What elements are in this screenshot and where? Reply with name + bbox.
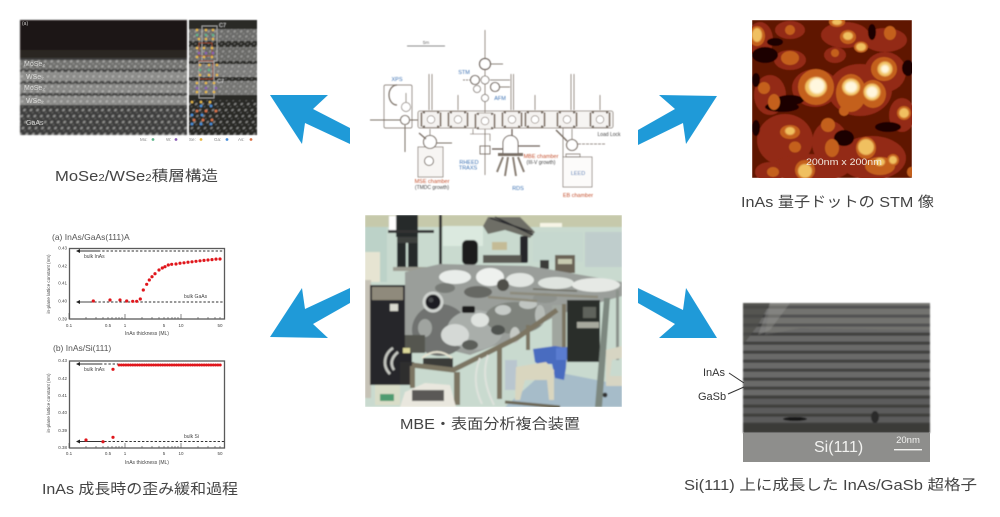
chart: InAs/GaAs(111)A lattice constant — [46, 232, 224, 337]
orange halos — [749, 17, 915, 180]
floor — [505, 370, 622, 407]
chart: InAs/Si(111) lattice constant — [46, 343, 224, 466]
label: InAs layer — [703, 367, 744, 383]
axis tick labels: 0.39 — [58, 428, 67, 433]
MSE chamber — [418, 129, 452, 177]
label: GaSb layer — [698, 387, 744, 403]
reference lines — [76, 362, 224, 444]
axis tick labels: 10 — [178, 451, 184, 456]
labels: dark: (TMDC growth) — [415, 185, 449, 191]
scale bar: 20nm — [894, 435, 922, 450]
axis tick labels — [46, 358, 223, 466]
legend: atom colours — [140, 137, 252, 142]
legend: atom colours: As: — [238, 137, 245, 142]
upper machinery — [483, 217, 535, 238]
labels: layer names: WSe₂ — [26, 98, 44, 105]
image: cross-section right with atom overlay: C7 — [219, 23, 226, 29]
chart title: (a) InAs/GaAs(111)A — [52, 232, 130, 242]
XPS module — [384, 85, 412, 152]
axis tick labels: 0.42 — [58, 376, 67, 381]
axis tick labels: 0.40 — [58, 410, 67, 415]
panel: MoSe2/WSe2 stacked structure micrograph — [20, 20, 257, 142]
panel: STM image of InAs quantum dots — [747, 17, 915, 182]
labels: red: MBE chamber — [524, 154, 559, 160]
labels: red: MSE chamber — [415, 179, 450, 185]
image: cross-section right with atom overlay: C7 — [217, 79, 224, 85]
image: cross-section right with atom overlay — [189, 20, 257, 135]
axis tick labels: 5 — [163, 451, 166, 456]
axis tick labels: 0.42 — [58, 264, 67, 268]
bright dots — [752, 19, 909, 178]
axis tick labels: 0.40 — [58, 298, 67, 304]
labels: layer names: GaAs — [26, 120, 44, 127]
panel: vacuum system diagram — [370, 30, 621, 199]
axis tick labels: 0.1 — [66, 451, 73, 456]
chart title: (b) InAs/Si(111) — [53, 343, 111, 353]
caption: MoSe2/WSe2: MoSe 2/WSe 2積層構造 — [55, 168, 218, 185]
right chair — [606, 346, 622, 386]
frame table — [412, 310, 557, 370]
labels: red — [415, 154, 593, 199]
left rack — [365, 280, 371, 398]
scale bar: 5m — [423, 40, 429, 45]
labels: dark: Load Lock — [597, 132, 621, 138]
main transfer line — [370, 30, 613, 175]
reference lines — [76, 249, 224, 304]
axis tick labels: 0.41 — [58, 280, 67, 286]
blue stools — [533, 346, 567, 380]
caption: STM image: InAs 量子ドットの STM 像 — [741, 194, 935, 211]
data points — [92, 257, 222, 303]
reference lines: bulk Si — [184, 434, 199, 440]
EB chamber and LEED — [556, 128, 606, 187]
labels: layer names: MoSe₂ — [24, 61, 45, 68]
labels: dark — [415, 132, 621, 191]
axis tick labels: in-plane lattice constant (nm) — [46, 254, 51, 313]
axis tick labels: 0.41 — [58, 393, 67, 398]
labels: blue: RDS — [512, 186, 524, 192]
labels: layer names: (a) — [22, 21, 28, 27]
legend: atom colours: W: — [166, 137, 171, 142]
reference lines: bulk InAs — [84, 254, 105, 260]
labels: blue: LEED — [571, 171, 585, 177]
axis tick labels — [46, 246, 223, 337]
silicon substrate — [743, 433, 930, 462]
MBE chamber — [470, 129, 540, 176]
axis tick labels: InAs thickness (ML) — [125, 460, 169, 466]
axis tick labels: 0.1 — [66, 323, 73, 328]
black cylinders — [396, 215, 418, 237]
reference lines: bulk InAs — [84, 367, 105, 373]
image: cross-section left — [20, 20, 187, 135]
reference lines: bulk GaAs — [184, 294, 208, 300]
labels: red: EB chamber — [563, 193, 593, 199]
labels: layer names: WSe₂ — [26, 74, 44, 81]
axis tick labels: 10 — [178, 323, 184, 328]
labels: blue: RHEED — [459, 160, 479, 166]
data points — [84, 365, 222, 443]
label: GaSb layer: GaSb — [698, 391, 726, 403]
label: scan size: 200nm x 200nm — [806, 157, 882, 168]
STM and AFM module — [463, 58, 510, 102]
caption: MBE apparatus: MBE・表面分析複合装置 — [400, 416, 580, 433]
arrow: to top left — [270, 95, 350, 144]
axis tick labels: 0.39 — [58, 316, 67, 322]
dark pits — [752, 24, 914, 146]
labels: layer names — [22, 21, 45, 127]
axis tick labels: 50 — [217, 451, 223, 456]
horizontal rails — [488, 297, 537, 301]
axis tick labels: in-plane lattice constant (nm) — [46, 373, 51, 432]
labels: dark: (III-V growth) — [527, 160, 556, 166]
labels: blue: AFM — [494, 96, 506, 102]
axis tick labels: 0.5 — [105, 323, 112, 328]
white stool — [515, 362, 554, 400]
axis tick labels: 0.43 — [58, 246, 67, 250]
legend: atom colours: Ga: — [214, 137, 221, 142]
plot frame — [70, 361, 224, 448]
arrow: to bottom left — [270, 288, 350, 338]
label: Si(111): Si(111) — [814, 439, 863, 456]
arrow: to top right — [638, 95, 717, 145]
tick marks — [69, 443, 220, 448]
labels: blue — [391, 70, 585, 192]
silver apparatus — [405, 264, 622, 355]
axis tick labels: 5 — [163, 323, 166, 328]
panel: TEM image of superlattice — [743, 303, 930, 462]
axis tick labels: 0.38 — [58, 445, 67, 450]
label: InAs layer: InAs — [703, 367, 726, 379]
arrow: to bottom right — [638, 288, 717, 338]
axis tick labels: 0.5 — [105, 451, 112, 456]
labels: blue: TRAXS — [459, 166, 477, 172]
right post — [595, 298, 610, 407]
caption: superlattice: Si(111) 上に成長した InAs/GaSb 超格子 — [684, 477, 977, 494]
legend: atom colours: Mo: — [140, 137, 148, 142]
axis tick labels: InAs thickness (ML) — [125, 331, 169, 337]
plot frame — [70, 248, 224, 319]
tick marks — [69, 313, 220, 319]
white box at bottom — [400, 383, 456, 407]
axis tick labels: 50 — [217, 323, 223, 328]
labels: layer names: MoSe₂ — [24, 85, 45, 92]
legend: atom colours: Se: — [189, 137, 196, 142]
labels: blue: XPS — [391, 77, 403, 83]
axis tick labels: 1 — [124, 323, 127, 328]
panel: MBE apparatus photograph — [365, 215, 622, 407]
scale bar: 20nm: 20nm — [896, 435, 920, 446]
labels: blue: STM — [458, 70, 470, 76]
scale bar — [407, 40, 445, 46]
image: superlattice layers — [743, 303, 930, 433]
axis tick labels: 0.43 — [58, 358, 67, 363]
axis tick labels: 1 — [124, 451, 127, 456]
caption: InAs relaxation: InAs 成長時の歪み緩和過程 — [42, 481, 238, 498]
dark equipment right — [567, 300, 600, 362]
terraces — [747, 21, 915, 182]
